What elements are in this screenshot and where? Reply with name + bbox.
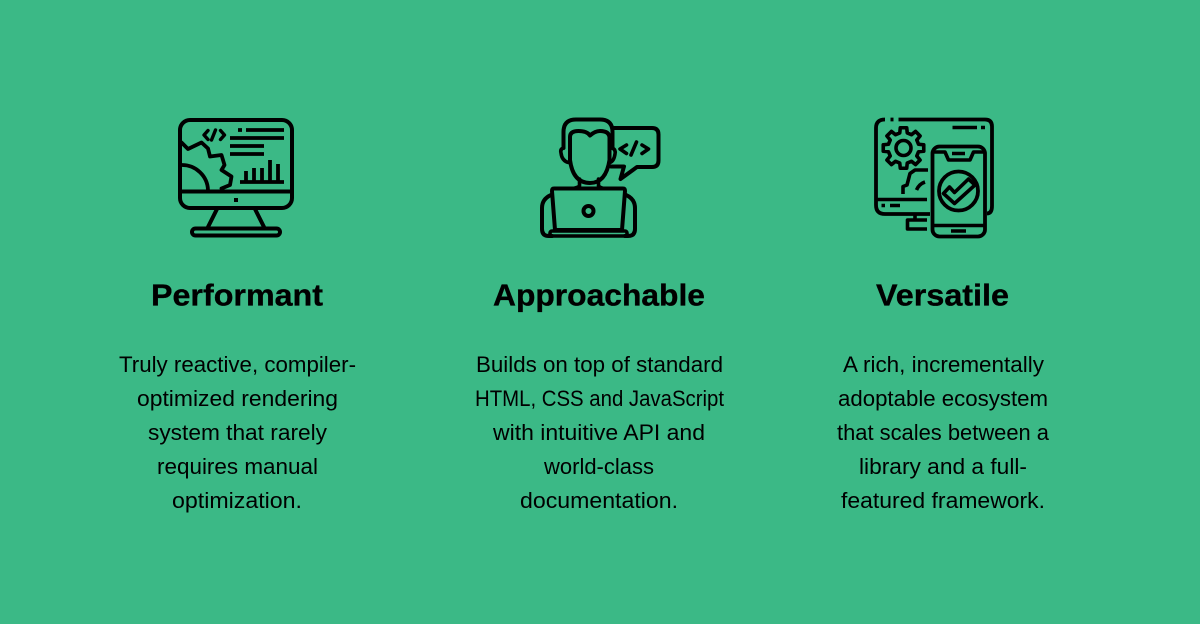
- text block: Approachable description: [475, 352, 724, 513]
- text block: Performant description: optimization.: [172, 488, 302, 513]
- text block: Performant description: Truly reactive, compiler-: [119, 352, 356, 377]
- text block: Approachable description: documentation.: [520, 488, 678, 513]
- text block: Versatile description: featured framework.: [841, 488, 1045, 513]
- text block: Versatile description: that scales between a: [837, 420, 1050, 445]
- text block: Approachable description: world-class: [543, 454, 654, 479]
- text block: Approachable description: HTML, CSS and JavaScript: [475, 386, 724, 411]
- text block: Versatile description: adoptable ecosystem: [838, 386, 1048, 411]
- icon: desktop monitor with gear, code and bar chart: [180, 120, 292, 236]
- heading: Performant: Performant: [151, 278, 323, 312]
- text block: Approachable description: Builds on top of standard: [476, 352, 723, 377]
- text block: Performant description: [119, 352, 356, 513]
- heading: Versatile: Versatile: [876, 278, 1009, 312]
- heading: Approachable: Approachable: [493, 278, 705, 312]
- icon: monitor and smartphone with gears and check mark: [876, 120, 992, 236]
- text block: Versatile description: [837, 352, 1050, 513]
- text block: Performant description: optimized rendering: [137, 386, 338, 411]
- text block: Versatile description: library and a full-: [859, 454, 1027, 479]
- icon: developer with laptop and code speech bubble: [542, 120, 658, 236]
- text block: Versatile description: A rich, incrementally: [843, 352, 1044, 377]
- panel: Performant: [119, 120, 356, 513]
- panel: Approachable: [475, 120, 724, 513]
- text block: Performant description: system that rarely: [148, 420, 327, 445]
- text block: Performant description: requires manual: [157, 454, 318, 479]
- text block: Approachable description: with intuitive API and: [492, 420, 705, 445]
- panel: Versatile: [837, 120, 1050, 513]
